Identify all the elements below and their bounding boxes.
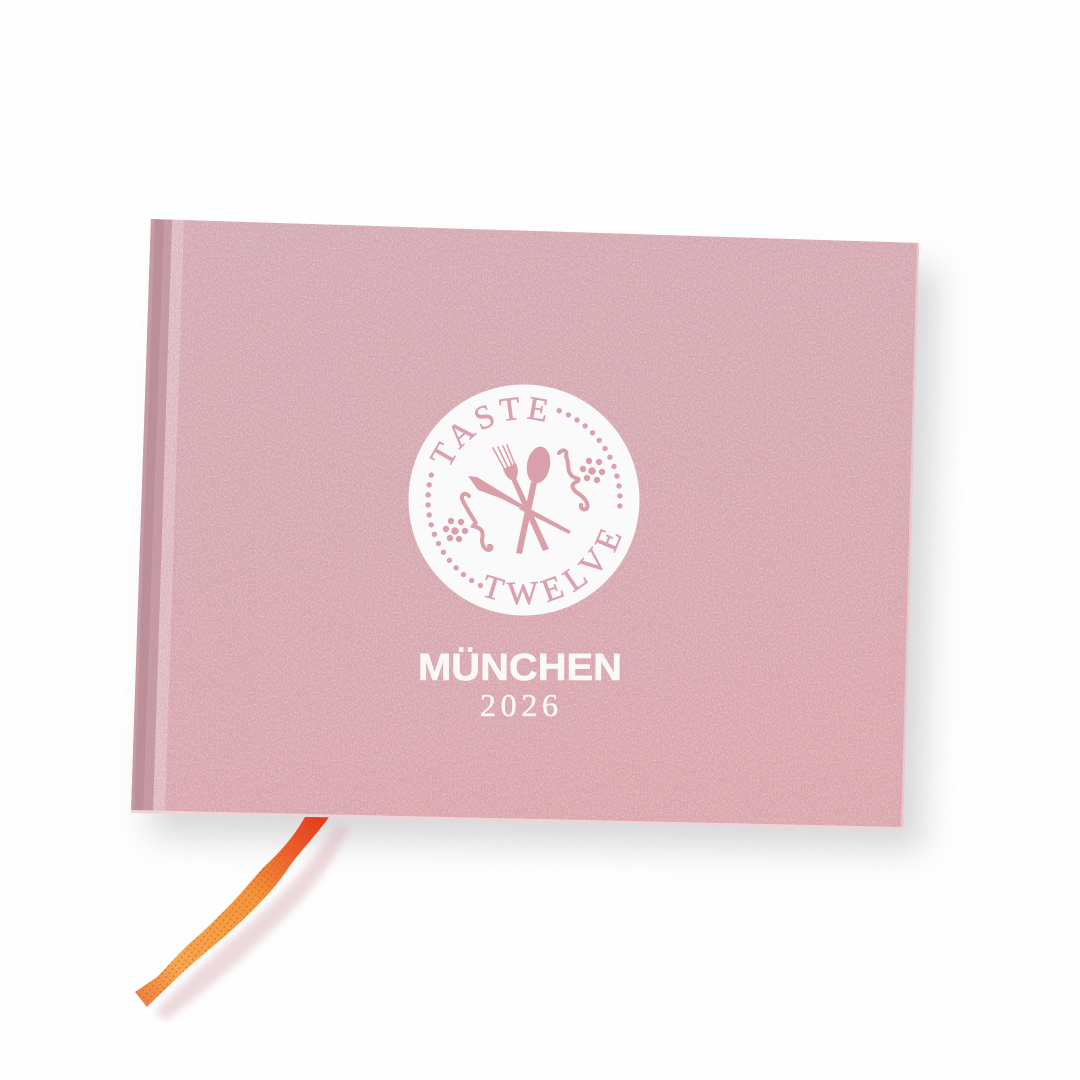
spine light hinge	[153, 220, 184, 813]
right edge highlight	[901, 243, 919, 829]
badge text: TASTE: TASTE	[430, 396, 548, 465]
dotted arcs	[428, 411, 620, 586]
cover board	[131, 219, 919, 829]
linen texture	[125, 215, 925, 835]
icon: right dot cluster	[580, 458, 605, 483]
product photo: book on white background	[131, 219, 951, 1021]
book shadow	[150, 260, 938, 850]
logo badge	[408, 384, 640, 616]
icon: fork	[493, 445, 549, 551]
icon: left dot cluster	[443, 518, 468, 542]
icon: knife	[468, 476, 571, 534]
book cover	[125, 215, 925, 835]
bookmark ribbon	[135, 817, 329, 1007]
icon: left ribbon flourish	[462, 494, 491, 550]
icon: right ribbon flourish	[559, 450, 587, 509]
title: München: MÜNCHEN	[418, 646, 622, 689]
year: 2026: 2026	[480, 687, 558, 723]
spine dark band	[131, 219, 172, 813]
badge text: TWELVE: TWELVE	[484, 529, 622, 605]
white disc	[408, 384, 640, 616]
icon: spoon	[516, 445, 553, 554]
bottom page edge highlight	[131, 810, 903, 830]
spine shadow line	[134, 219, 164, 813]
ribbon shadow	[155, 825, 350, 1020]
